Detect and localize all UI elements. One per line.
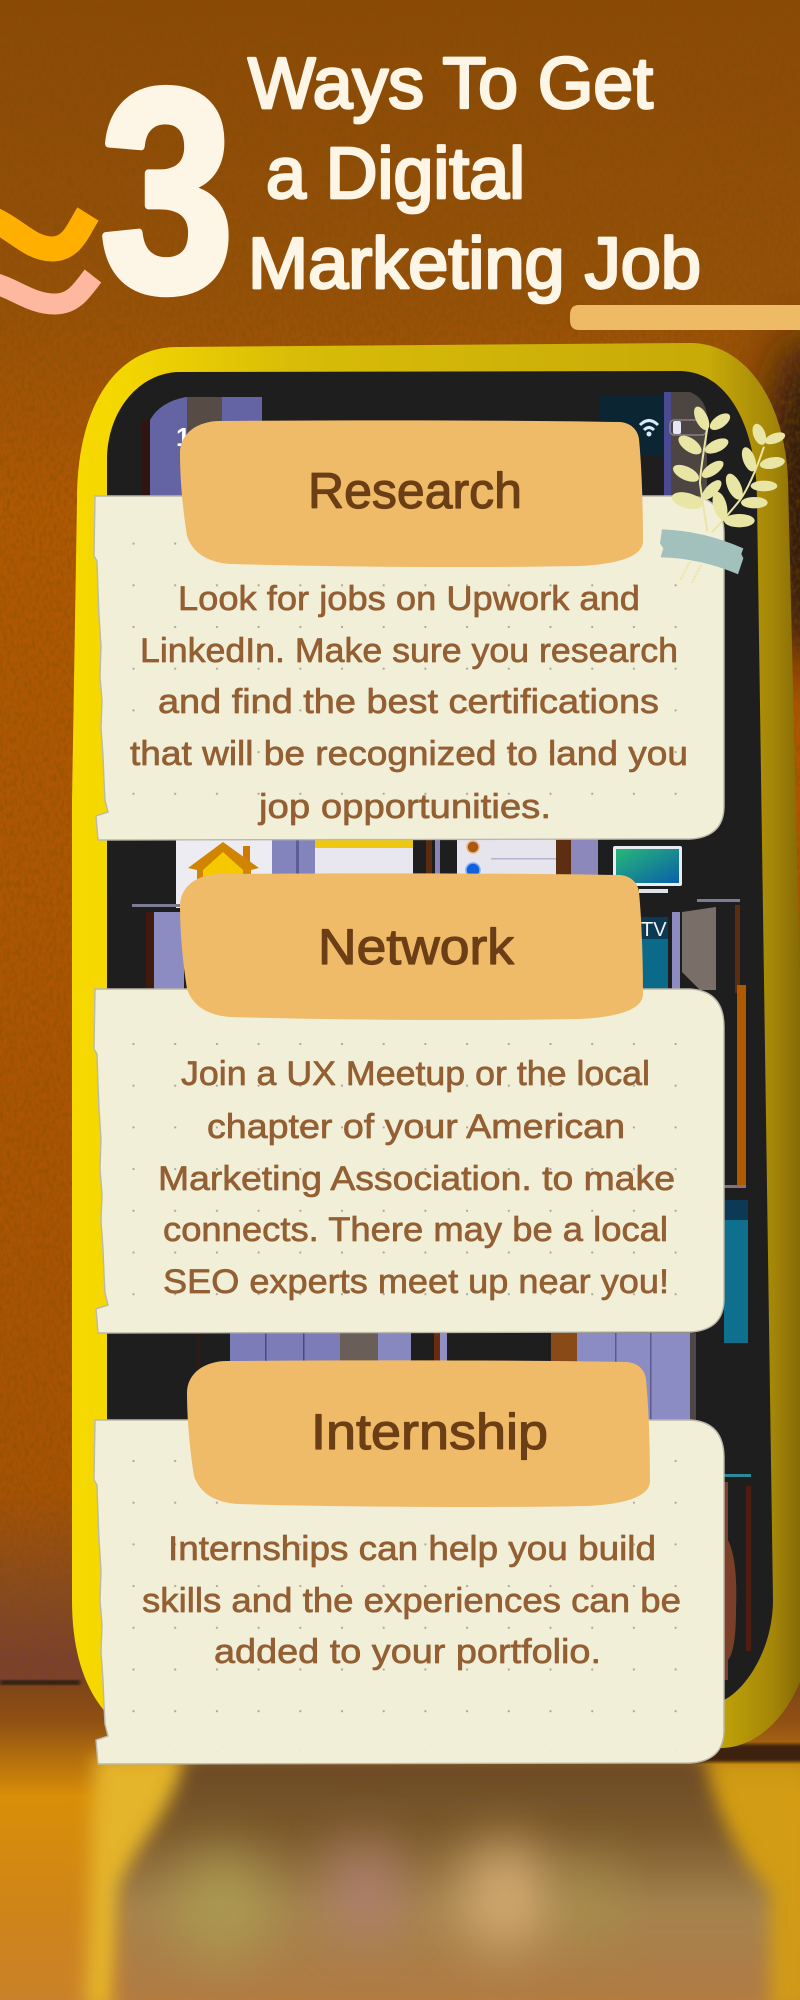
- screen: top status area: 12: [176, 422, 205, 452]
- title line three: Marketing Job: [248, 224, 701, 304]
- screen: app icons between first and second notes: TV: [641, 919, 667, 941]
- title numeral: 3: [100, 30, 234, 352]
- panel: network note: [94, 989, 724, 1333]
- note dot grid: [132, 528, 678, 824]
- phone case: [72, 343, 800, 1750]
- text block: network: Marketing Association. to make: [158, 1160, 675, 1198]
- screen: right of third note: [724, 1474, 751, 1680]
- screen: app icons between first and second notes: [132, 838, 740, 993]
- text block: research: [130, 580, 688, 826]
- panel: internship note: [94, 1420, 724, 1764]
- title: [100, 30, 701, 352]
- text block: network: chapter of your American: [207, 1108, 625, 1146]
- tab: research: [180, 420, 643, 567]
- screen: top status area: [142, 392, 707, 497]
- text block: network: [158, 1055, 675, 1301]
- decoration: orange squiggle: [0, 214, 88, 249]
- tab: network: [180, 873, 643, 1020]
- note dot grid: [132, 1446, 678, 1752]
- text block: research: that will be recognized to land you: [130, 735, 688, 773]
- title line one: Ways To Get: [248, 44, 653, 124]
- text block: research: LinkedIn. Make sure you research: [140, 632, 678, 670]
- panel: research note: [94, 496, 724, 840]
- heading: network: Network: [318, 919, 515, 975]
- text block: network: connects. There may be a local: [163, 1211, 668, 1249]
- text block: internship: skills and the experiences can be: [142, 1582, 681, 1620]
- decoration: plant sprig with tape: [660, 404, 787, 583]
- text block: internship: [142, 1530, 681, 1671]
- decoration: title underline bar: [570, 305, 800, 330]
- icon: TV monitor: [613, 846, 682, 893]
- background: reflective floor: [0, 1680, 800, 2000]
- text block: internship: Internships can help you build: [168, 1530, 656, 1568]
- screen: columns between second and third notes: [197, 1333, 696, 1423]
- heading: research: Research: [308, 463, 522, 519]
- text block: network: Join a UX Meetup or the local: [181, 1055, 650, 1093]
- heading: internship: Internship: [311, 1404, 548, 1460]
- note dot grid: [132, 1014, 678, 1320]
- text block: research: jop opportunities.: [258, 788, 551, 826]
- tab: internship: [187, 1360, 650, 1507]
- title line two: a Digital: [266, 134, 525, 214]
- text block: research: Look for jobs on Upwork and: [178, 580, 640, 618]
- screen: right of second note: [724, 985, 748, 1343]
- decoration: pink squiggle: [0, 276, 93, 304]
- phone screen: [107, 371, 773, 1700]
- text block: internship: added to your portfolio.: [214, 1633, 601, 1671]
- icon: home app: [188, 842, 259, 885]
- text block: research: and find the best certifications: [158, 683, 659, 721]
- text block: network: SEO experts meet up near you!: [163, 1263, 669, 1301]
